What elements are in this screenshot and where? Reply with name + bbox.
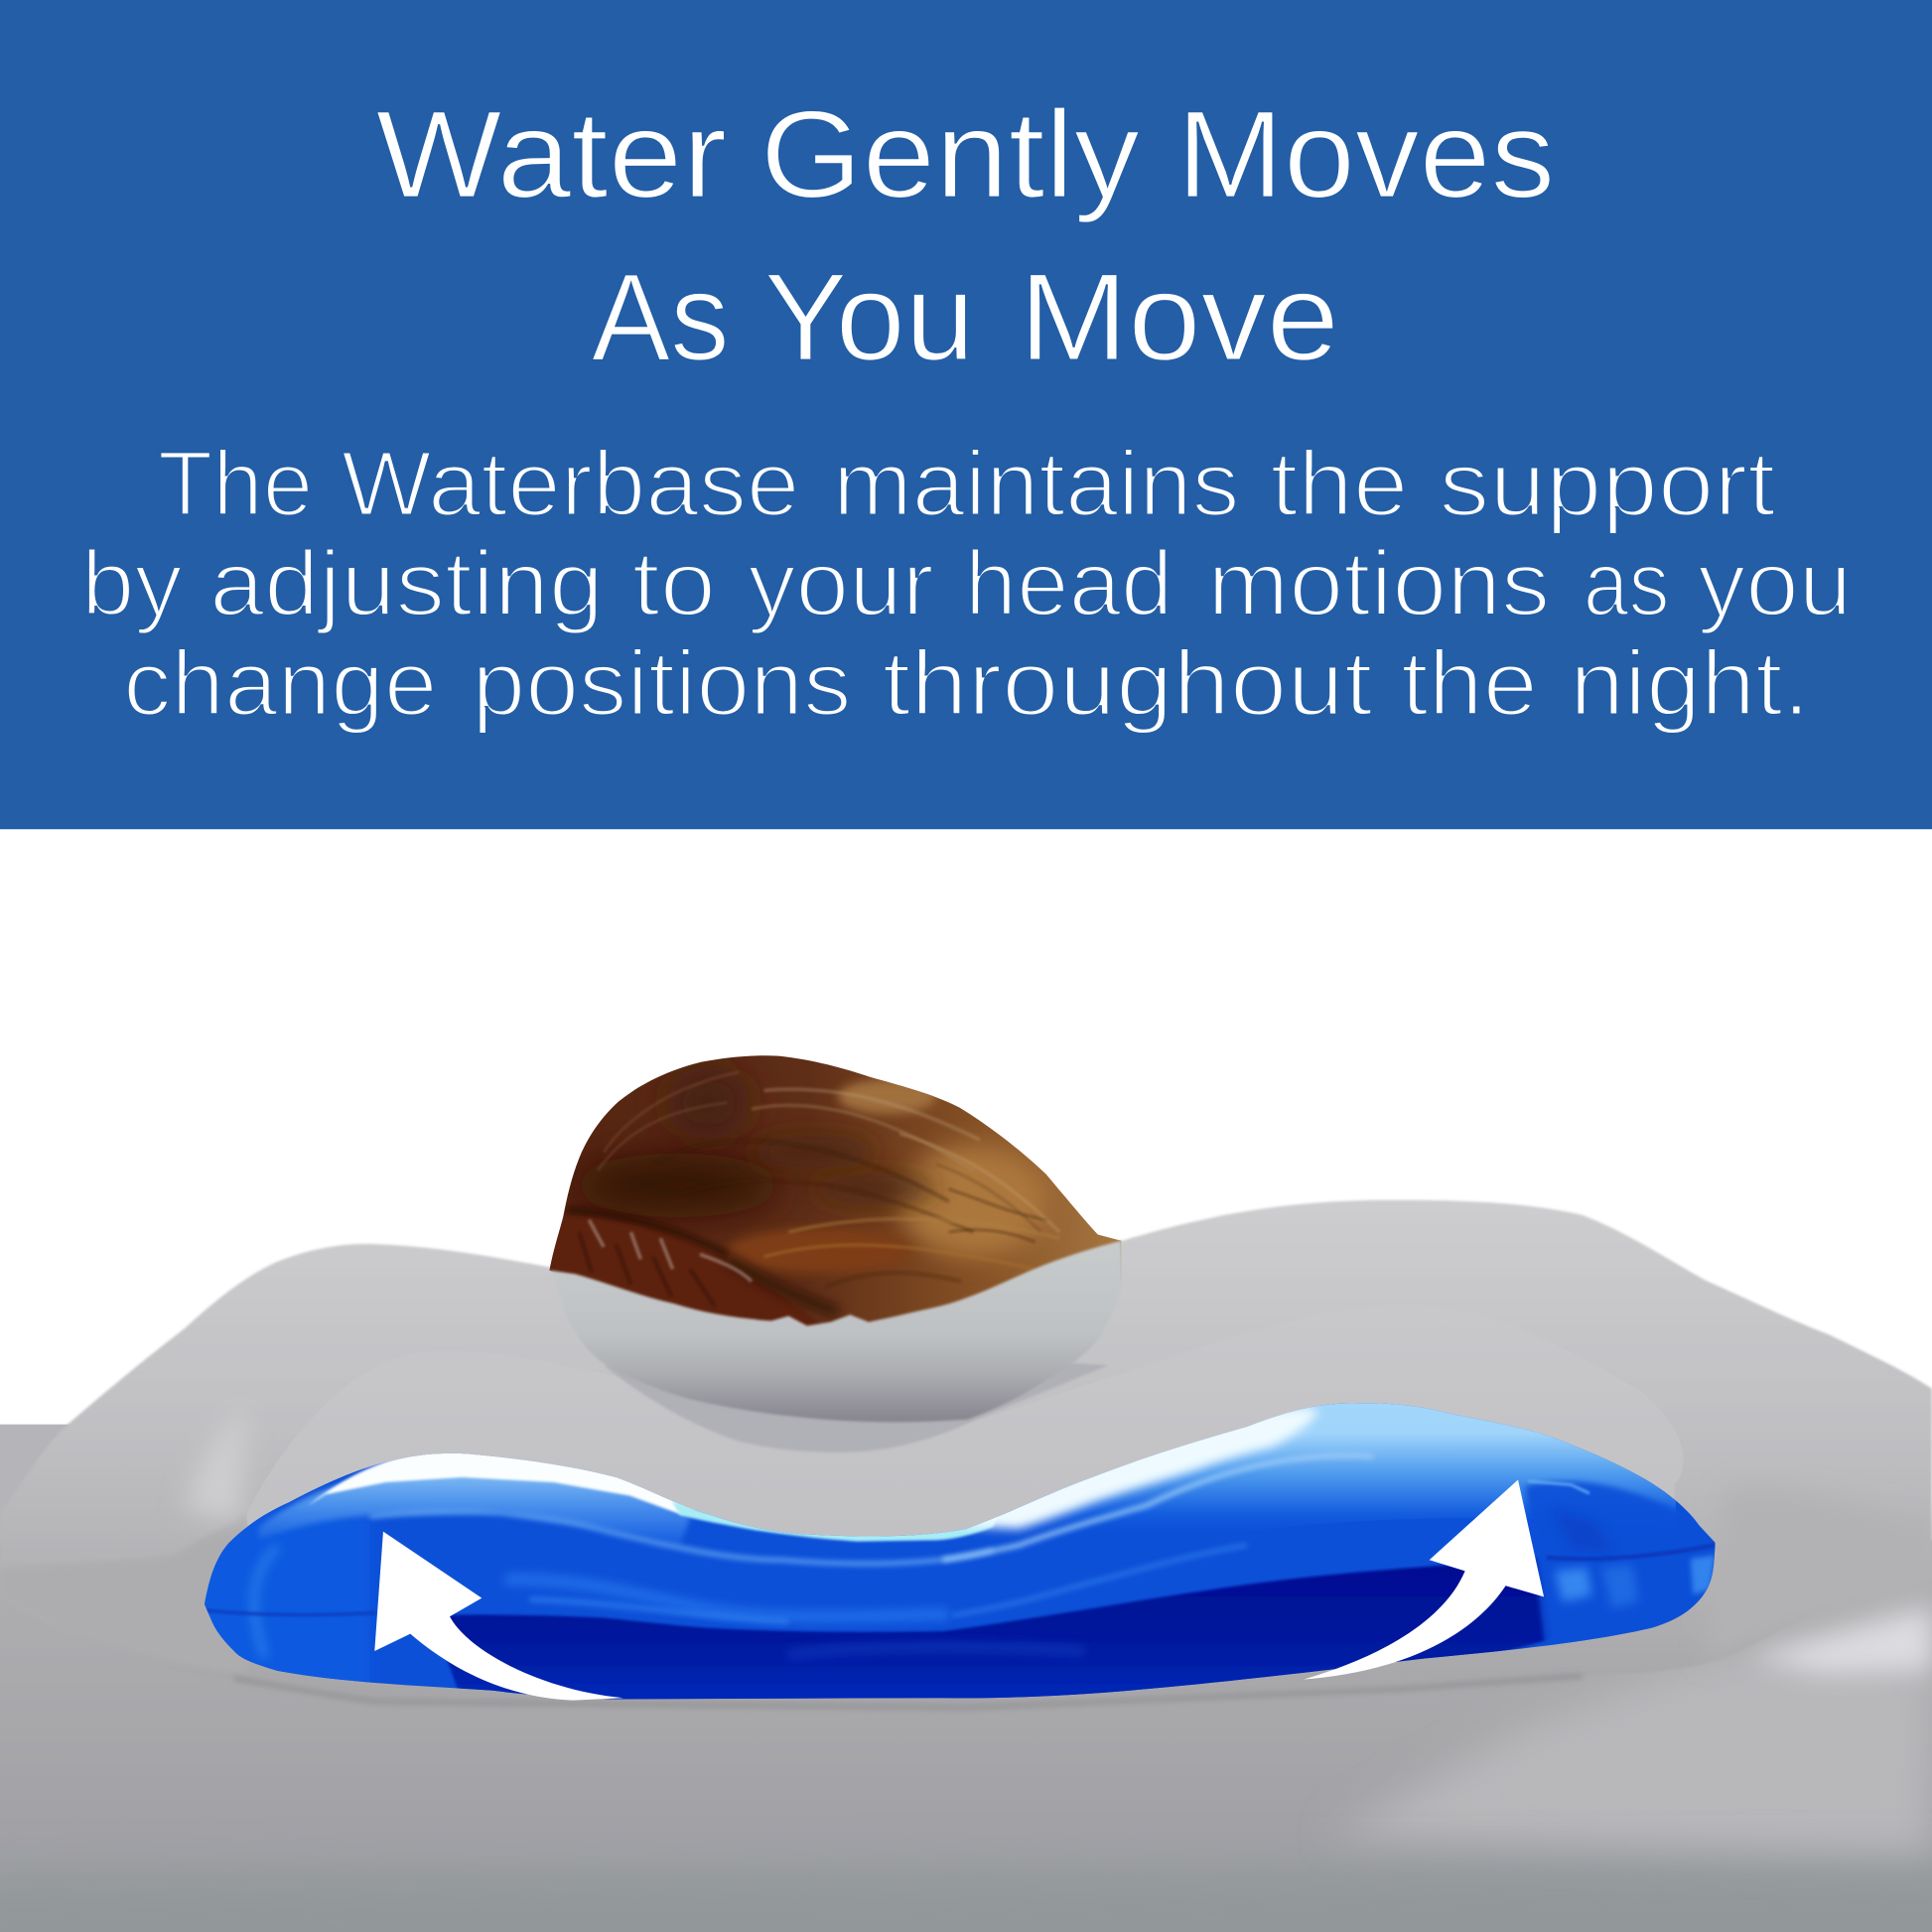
water base gel pad — [205, 1403, 1716, 1700]
bed surface — [0, 1425, 1932, 1932]
inner pillow core — [246, 1305, 1684, 1614]
description text: The — [158, 432, 313, 535]
description text: positions — [472, 631, 852, 735]
pillow shading — [0, 1405, 1932, 1708]
arrow: right curved up — [1304, 1480, 1544, 1680]
gel left light zone — [257, 1475, 691, 1543]
description text: you — [1698, 531, 1852, 634]
description text: throughout — [883, 631, 1373, 735]
description text: the — [1401, 631, 1538, 735]
header panel — [0, 0, 1932, 829]
illustration: head on water pillow — [0, 1047, 1932, 1932]
description text — [81, 432, 1852, 735]
gel left seam — [205, 1610, 376, 1615]
description text: adjusting — [209, 531, 604, 634]
pillow outer cover — [0, 1200, 1932, 1707]
title: As — [592, 247, 730, 386]
title: Move — [1019, 247, 1339, 386]
gel right light zone — [989, 1403, 1676, 1521]
title: Water — [376, 85, 727, 224]
description text: as — [1584, 531, 1670, 634]
header background — [0, 0, 1932, 829]
gel left end body — [198, 1512, 369, 1688]
head pocket in pillow — [550, 1241, 1123, 1422]
description text: night. — [1570, 631, 1810, 735]
gel dark lower layer — [446, 1557, 1549, 1700]
description text: the — [1271, 432, 1409, 535]
lower hair section below parting — [542, 1213, 826, 1328]
title: Moves — [1176, 85, 1555, 224]
arrow: left curved up — [374, 1532, 623, 1701]
gel mid ripples — [369, 1511, 1247, 1621]
hair shading — [573, 1066, 1047, 1273]
description text: your — [748, 531, 934, 634]
shadow under head pocket — [604, 1343, 1109, 1452]
head: hair — [550, 1055, 1122, 1327]
description text: change — [123, 631, 438, 735]
description text: to — [632, 531, 716, 634]
title: Gently — [760, 85, 1140, 224]
description text: Waterbase — [342, 432, 799, 535]
description text: head — [965, 531, 1173, 634]
title — [376, 85, 1555, 386]
description text: motions — [1207, 531, 1550, 634]
gel base — [205, 1403, 1716, 1700]
hair strands — [598, 1072, 1059, 1288]
gel right secondary highlight — [942, 1455, 1374, 1560]
title: You — [763, 247, 975, 386]
description text: support — [1440, 432, 1776, 535]
gel white highlights — [308, 1408, 1318, 1542]
description text: maintains — [833, 432, 1240, 535]
gel navy streaks — [788, 1647, 1084, 1655]
description text: by — [81, 531, 183, 634]
gel right end — [1525, 1481, 1719, 1657]
